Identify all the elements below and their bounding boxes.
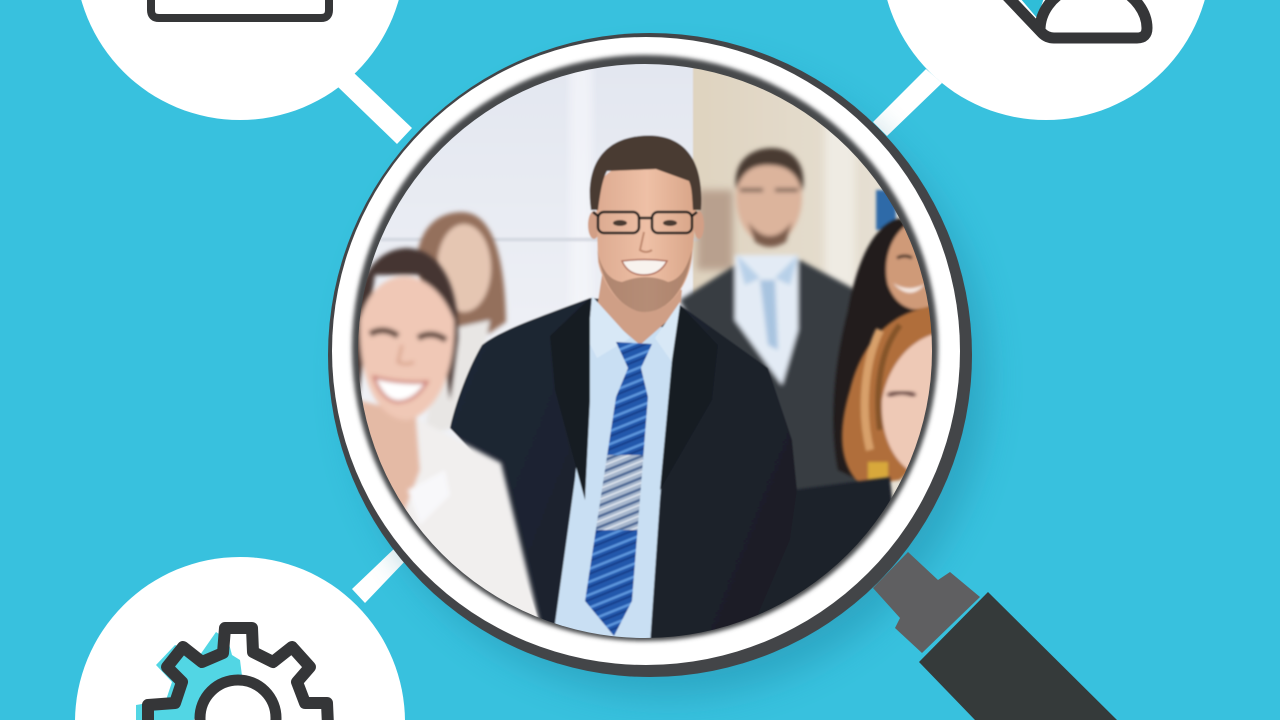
glasses — [593, 212, 697, 233]
main man — [450, 136, 797, 650]
background woman, right — [832, 216, 929, 478]
suit — [450, 298, 797, 650]
lens rim — [328, 33, 972, 677]
head — [596, 160, 698, 312]
icon: tray outline — [151, 0, 329, 18]
right lapel — [659, 304, 708, 490]
connector: top left — [338, 73, 412, 144]
right collar — [655, 302, 682, 362]
handle grip — [919, 592, 1117, 720]
icon: gear outline — [148, 628, 328, 720]
lens white ring — [332, 37, 960, 665]
nose — [640, 232, 652, 252]
background woman, left — [416, 212, 506, 440]
magnifier shadow — [350, 60, 986, 696]
eyes and brows — [370, 330, 446, 340]
icon: gear teal fill — [136, 632, 242, 720]
beard — [597, 250, 692, 312]
shirt — [554, 326, 674, 638]
front woman, left — [352, 248, 540, 625]
icon: person and pencil — [1005, 0, 1147, 38]
icon: gear hub — [200, 680, 276, 720]
connector: top right — [873, 69, 942, 136]
icon circle: top right — [881, 0, 1211, 120]
face — [360, 276, 454, 420]
magnifier lens — [328, 33, 972, 677]
eyes — [613, 220, 627, 226]
office wall — [358, 64, 904, 617]
ears — [588, 211, 600, 239]
hair — [590, 136, 701, 210]
left collar — [588, 296, 630, 358]
hair — [352, 248, 458, 400]
neck — [362, 398, 422, 513]
white jacket — [405, 418, 540, 625]
background man, right — [680, 148, 866, 510]
smile — [374, 377, 427, 402]
blouse collar — [406, 474, 448, 520]
magnifier handle — [873, 552, 1117, 720]
woman with red hair — [840, 306, 932, 484]
icon circle: bottom left — [75, 557, 405, 720]
icon circle: top left — [75, 0, 405, 120]
smile — [622, 260, 667, 275]
handle neck — [873, 552, 980, 653]
photo: team of people — [358, 64, 932, 638]
nose — [398, 345, 414, 364]
neck — [597, 275, 682, 345]
navy jacket, lower right — [756, 475, 894, 616]
left lapel — [550, 298, 590, 500]
lens inner edge — [352, 55, 938, 641]
tie — [584, 341, 652, 636]
connector: bottom left — [352, 546, 408, 603]
